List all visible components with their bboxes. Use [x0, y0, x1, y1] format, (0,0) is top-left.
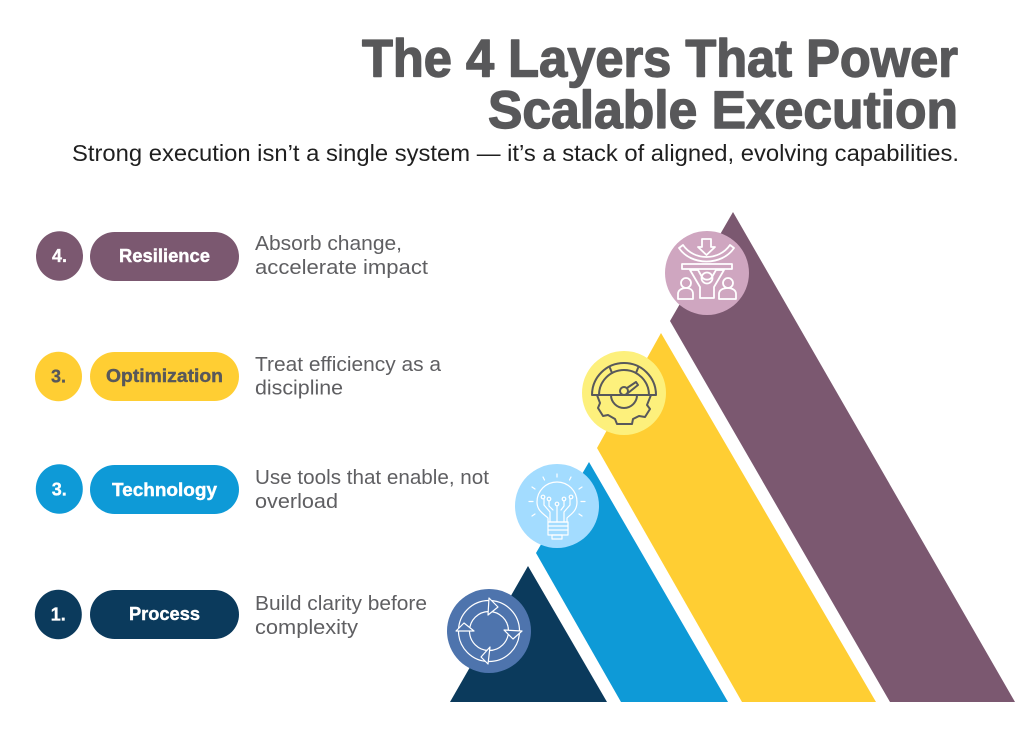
- number badge 1: 1.: [51, 604, 66, 624]
- description: resilience: accelerate impact: [255, 257, 428, 279]
- icon: process cycle arrows: [447, 589, 531, 673]
- layer: optimization band: [597, 333, 876, 702]
- description: technology: overload: [255, 491, 338, 513]
- title: The 4 Layers That Power: [362, 30, 958, 88]
- number badge 3: 3.: [51, 366, 66, 386]
- title: [362, 30, 958, 140]
- pill: optimization: [90, 352, 239, 401]
- description: process: Build clarity before: [255, 593, 427, 615]
- title: Scalable Execution: [488, 81, 958, 140]
- pill: process: Process: [129, 603, 200, 624]
- number badge 1: [35, 590, 82, 639]
- pill: process: [90, 590, 239, 639]
- row 1: process: [35, 590, 427, 639]
- icon: resilience people under pressure: [665, 231, 749, 315]
- pill: resilience: Resilience: [119, 245, 210, 266]
- row 2: technology: [36, 464, 489, 514]
- number badge 3: [35, 352, 82, 401]
- icon: technology light bulb: [515, 464, 599, 548]
- row 4: resilience: [36, 231, 428, 281]
- pill: technology: Technology: [112, 479, 218, 500]
- description: technology: Use tools that enable, not: [255, 467, 489, 489]
- number badge 3: [36, 464, 83, 514]
- row 3: optimization: [35, 352, 442, 401]
- description: process: [255, 593, 427, 639]
- description: optimization: [255, 354, 442, 400]
- pill: optimization: Optimization: [106, 365, 223, 386]
- description: optimization: discipline: [255, 378, 343, 400]
- layer: technology band: [536, 462, 728, 702]
- description: resilience: Absorb change,: [255, 233, 402, 255]
- icon: optimization gauge gear: [582, 351, 666, 435]
- subtitle: Strong execution isn’t a single system — it’s a stack of aligned, evolving capabilities.: [72, 140, 959, 166]
- pill: technology: [90, 465, 239, 514]
- layer: process triangle: [450, 566, 607, 702]
- pill: resilience: [90, 232, 239, 281]
- number badge 4: 4.: [52, 246, 67, 266]
- description: process: complexity: [255, 617, 358, 639]
- number badge 3: 3.: [52, 480, 67, 500]
- layer: resilience band: [670, 212, 1015, 702]
- number badge 4: [36, 231, 83, 281]
- description: optimization: Treat efficiency as a: [255, 354, 442, 376]
- description: resilience: [255, 233, 428, 279]
- description: technology: [255, 467, 489, 513]
- layer stack chart: [447, 212, 1015, 702]
